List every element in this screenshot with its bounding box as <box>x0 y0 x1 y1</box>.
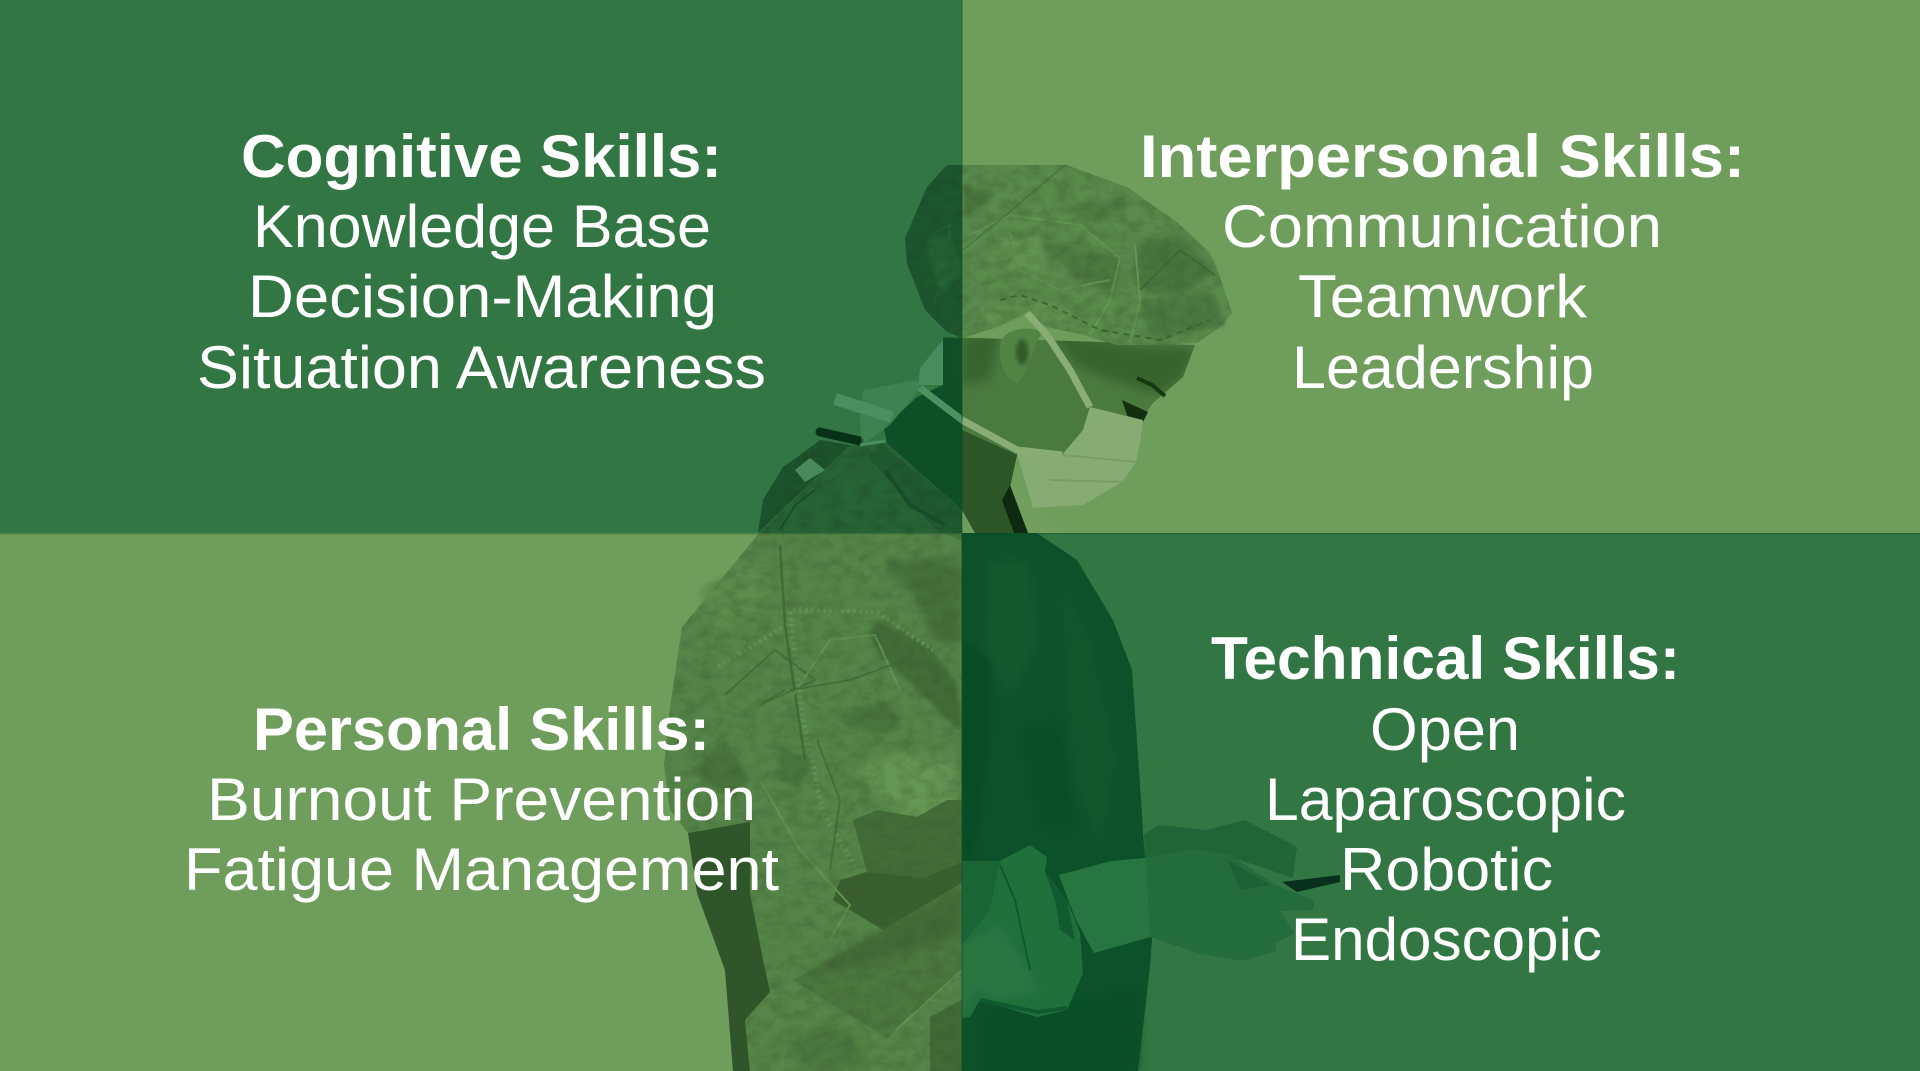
item: leadership: Leadership <box>1292 334 1594 401</box>
panel: cognitive background <box>0 0 962 533</box>
heading: personal skills: Personal Skills: <box>253 696 710 763</box>
item: knowledge base: Knowledge Base <box>253 193 711 260</box>
heading: interpersonal skills: Interpersonal Skills: <box>1140 123 1745 190</box>
gown: back and sleeve, left half <box>664 440 962 1071</box>
item: open: Open <box>1370 696 1520 763</box>
gown: front, right half <box>960 533 1340 1071</box>
mask strap, right of divider <box>962 420 1062 455</box>
item: fatigue management: Fatigue Management <box>184 836 779 903</box>
panel: technical background <box>962 533 1920 1071</box>
panel text: interpersonal skills <box>1140 123 1745 401</box>
heading: technical skills: Technical Skills: <box>1211 625 1680 692</box>
panel text: technical skills <box>1211 625 1680 973</box>
heading: cognitive skills: Cognitive Skills: <box>241 123 722 190</box>
item: teamwork: Teamwork <box>1298 263 1588 330</box>
item: burnout prevention: Burnout Prevention <box>207 766 756 833</box>
mask <box>1017 407 1143 508</box>
item: laparoscopic: Laparoscopic <box>1265 766 1626 833</box>
item: endoscopic: Endoscopic <box>1291 906 1602 973</box>
gown ties <box>795 340 943 482</box>
panel text: cognitive skills <box>197 123 766 401</box>
mask ear loop <box>1027 313 1090 407</box>
item: communication: Communication <box>1222 193 1662 260</box>
surgeon: light mask and ties <box>795 313 1143 533</box>
surgeon figure <box>664 165 1340 1071</box>
surgical cap <box>905 165 1232 345</box>
surgeon: shaded photo layer <box>664 165 1340 1071</box>
item: robotic: Robotic <box>1340 836 1553 903</box>
dark tie strap <box>820 432 860 441</box>
panel text: personal skills <box>184 696 779 903</box>
item: situation awareness: Situation Awareness <box>197 334 766 401</box>
mask strap, left of divider <box>920 388 962 420</box>
mask pleats <box>1062 455 1136 462</box>
mask fold shadow <box>1050 480 1122 482</box>
panel: personal background <box>0 533 962 1071</box>
collar <box>1010 485 1028 533</box>
item: decision-making: Decision-Making <box>248 263 717 330</box>
neck and face <box>884 328 1195 533</box>
panel: interpersonal background <box>962 0 1920 533</box>
